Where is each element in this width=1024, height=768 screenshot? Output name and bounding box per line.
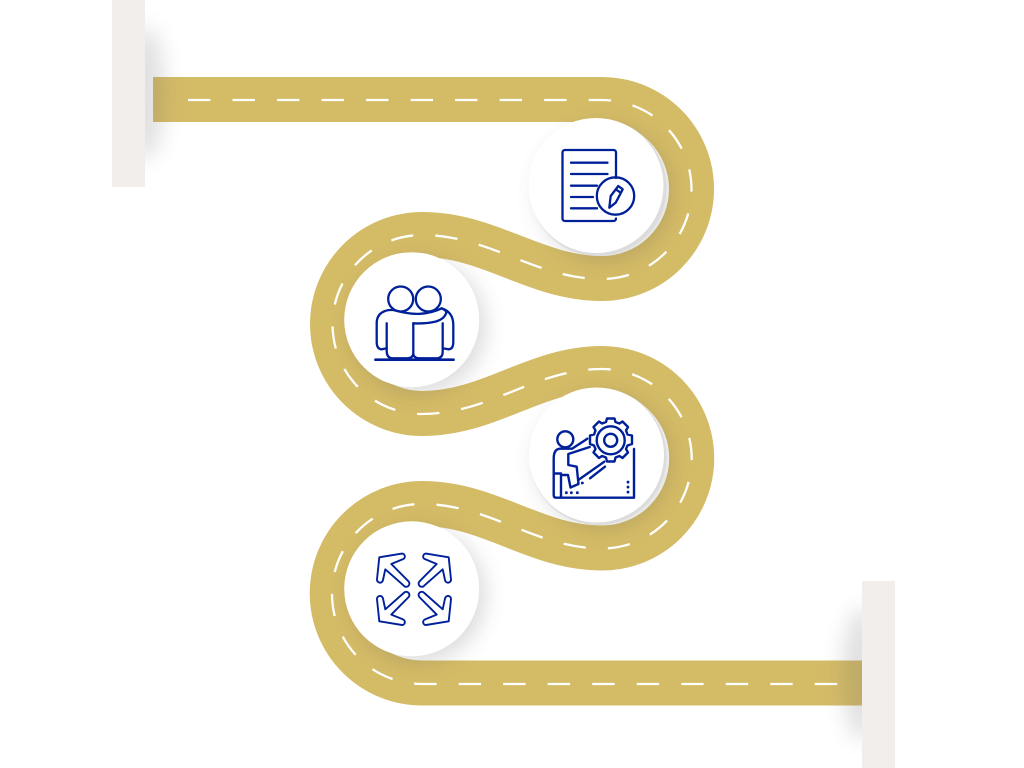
icon: two people embracing xyxy=(376,286,454,360)
step 2 disc: people icon xyxy=(344,252,486,394)
right post xyxy=(842,581,895,768)
winding road xyxy=(153,100,862,684)
road centre dashes xyxy=(188,100,840,684)
left post xyxy=(112,0,165,187)
icon: document with pencil xyxy=(562,150,634,221)
icon: four outward arrows xyxy=(377,554,451,625)
step 3 disc: climbing gear icon xyxy=(529,388,671,529)
step 1 disc: document icon xyxy=(528,118,672,261)
icon: person pushing gear uphill xyxy=(554,418,634,498)
step 4 disc: expand arrows icon xyxy=(344,521,486,663)
